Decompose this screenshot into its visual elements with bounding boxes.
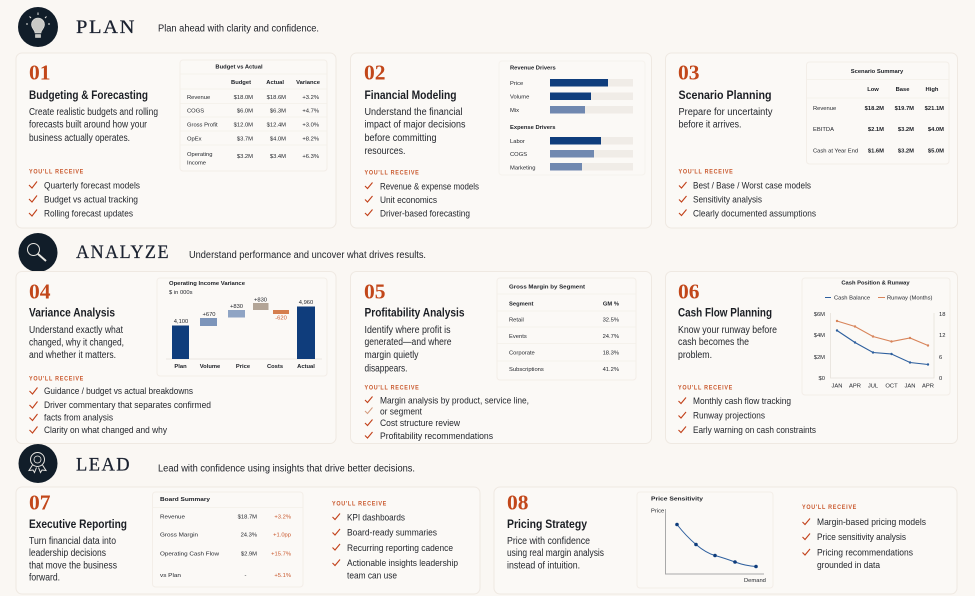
table: scenario summary: $4.0M: [928, 127, 944, 133]
you'll receive list: YOU'LL RECEIVE: [364, 170, 420, 176]
you'll receive list: Profitability recommendations: [380, 431, 493, 442]
chart: cash position and runway: APR: [922, 384, 934, 390]
table: gross margin by segment: Events: [509, 334, 527, 340]
table: budget vs actual: $18.6M: [267, 95, 286, 101]
description: impact of major decisions: [364, 120, 466, 130]
chart: cash position and runway: JAN: [905, 384, 915, 390]
card title: Pricing Strategy: [507, 519, 588, 531]
you'll receive list: Early warning on cash constraints: [693, 425, 816, 436]
table: budget vs actual: Operating: [187, 152, 212, 158]
card title: Scenario Planning: [678, 90, 772, 102]
table: scenario summary: High: [926, 87, 939, 93]
number 08: 08: [507, 490, 529, 514]
table: scenario summary: Cash at Year End: [813, 148, 858, 154]
you'll receive list: Margin analysis by product, service line,: [380, 396, 529, 406]
description: [364, 325, 452, 374]
description: Identify where profit is: [364, 325, 450, 336]
panel: 03 scenario planning: [666, 53, 958, 228]
description: forward.: [29, 572, 60, 584]
chart: cash position and runway: 12: [939, 333, 945, 339]
you'll receive list: [364, 170, 479, 220]
table: gross margin by segment: Segment: [509, 302, 534, 308]
you'll receive list: Revenue & expense models: [380, 182, 479, 192]
icon: magnifying glass: [18, 233, 58, 272]
description: forecasts built around how your: [29, 120, 148, 130]
chart: cash position and runway: $0: [819, 376, 825, 382]
table: board summary: +3.2%: [274, 514, 291, 520]
you'll receive list: Clearly documented assumptions: [693, 208, 816, 220]
you'll receive list: Guidance / budget vs actual breakdowns: [44, 386, 193, 397]
table: budget vs actual: Actual: [266, 80, 284, 86]
you'll receive list: [29, 170, 140, 220]
description: Price with confidence: [507, 536, 590, 547]
you'll receive list: Best / Base / Worst case models: [693, 180, 811, 192]
description: [29, 536, 117, 584]
description: [678, 107, 772, 130]
you'll receive list: YOU'LL RECEIVE: [29, 376, 84, 382]
number 06: 06: [678, 280, 700, 304]
number 05: 05: [364, 280, 386, 304]
chart: operating income variance waterfall: $ in 000s: [169, 290, 193, 296]
chart: cash position and runway: JUL: [868, 384, 879, 390]
you'll receive list: Unit economics: [380, 195, 437, 206]
chart: cash position and runway: Runway (Months): [887, 296, 932, 302]
you'll receive list: YOU'LL RECEIVE: [678, 170, 734, 176]
description: generated—and where: [364, 337, 452, 348]
you'll receive list: Monthly cash flow tracking: [693, 396, 791, 407]
table: budget vs actual: $3.2M: [237, 154, 253, 160]
you'll receive list: Cost structure review: [380, 418, 460, 429]
you'll receive list: [29, 376, 211, 436]
you'll receive list: [332, 502, 458, 582]
chart: cash position and runway: $2M: [814, 355, 825, 361]
description: before committing: [364, 133, 436, 144]
chart: operating income variance waterfall: Operating Income Variance: [169, 281, 246, 287]
you'll receive list: Runway projections: [693, 410, 765, 422]
chart: cash position and runway: 0: [939, 376, 942, 382]
number 04: 04: [29, 280, 51, 304]
table: budget vs actual: $6.3M: [270, 108, 286, 114]
table: budget vs actual: $12.4M: [267, 122, 286, 128]
panel: 06 cash flow planning: [666, 272, 958, 444]
chart: cash position and runway: Cash Balance: [834, 296, 870, 302]
table: budget vs actual: OpEx: [187, 136, 202, 142]
description: before it arrives.: [678, 120, 742, 130]
icon: award ribbon: [18, 444, 58, 483]
you'll receive list: [364, 386, 529, 442]
description: [364, 107, 466, 157]
you'll receive list: [678, 170, 816, 220]
chart: cash position and runway: 18: [939, 312, 945, 318]
table: budget vs actual: COGS: [187, 108, 204, 114]
you'll receive list: Driver-based forecasting: [380, 208, 470, 220]
panel: 02 financial modeling: [350, 53, 652, 228]
you'll receive list: YOU'LL RECEIVE: [29, 170, 84, 176]
description: resources.: [364, 146, 406, 157]
you'll receive list: Pricing recommendations: [817, 548, 913, 558]
chart: revenue and expense drivers: Volume: [510, 94, 529, 100]
you'll receive list: facts from analysis: [44, 412, 113, 424]
chart: revenue and expense drivers: Mix: [510, 108, 519, 114]
chart: operating income variance waterfall: -620: [275, 316, 287, 322]
table: board summary: +5.1%: [274, 573, 291, 579]
table: scenario summary: Scenario Summary: [851, 69, 904, 75]
you'll receive list: KPI dashboards: [347, 512, 405, 524]
chart: operating income variance waterfall: Actual: [297, 364, 315, 370]
panel: 04 variance analysis: [16, 272, 336, 444]
you'll receive list: Rolling forecast updates: [44, 208, 133, 220]
chart: price sensitivity curve: Price: [651, 508, 664, 514]
table: board summary: $18.7M: [238, 514, 257, 520]
table: scenario summary: $3.2M: [898, 127, 914, 133]
table: board summary: Operating Cash Flow: [160, 552, 220, 558]
description: using real margin analysis: [507, 548, 604, 559]
table: board summary: Gross Margin: [160, 532, 198, 538]
table: budget vs actual: Gross Profit: [187, 122, 218, 128]
chart: cash position and runway: $4M: [814, 333, 825, 339]
chart: revenue and expense drivers: Price: [510, 81, 523, 87]
description: Create realistic budgets and rolling: [29, 107, 158, 118]
table: scenario summary: [806, 62, 949, 164]
table: budget vs actual: $4.0M: [270, 136, 286, 142]
description: business actually operates.: [29, 133, 130, 144]
table: scenario summary: $2.1M: [868, 127, 884, 133]
table: budget vs actual: Income: [187, 160, 206, 166]
chart: revenue and expense drivers: Expense Drivers: [510, 125, 555, 131]
panel: 01 budgeting and forecasting: [16, 53, 336, 228]
description: disappears.: [364, 364, 408, 374]
number 01: 01: [29, 60, 50, 84]
you'll receive list: Price sensitivity analysis: [817, 532, 906, 543]
table: budget vs actual: +3.2%: [302, 95, 319, 101]
table: scenario summary: $5.0M: [928, 148, 944, 154]
number 02: 02: [364, 60, 386, 84]
description: and whether it matters.: [29, 350, 116, 361]
you'll receive list: Quarterly forecast models: [44, 180, 140, 192]
description: Understand the financial: [364, 107, 462, 118]
you'll receive list: Board-ready summaries: [347, 528, 437, 538]
chart: cash position and runway: [802, 278, 950, 395]
table: scenario summary: $3.2M: [898, 148, 914, 154]
number 07: 07: [29, 490, 51, 514]
chart: revenue and expense drivers: Labor: [510, 139, 525, 145]
table: board summary: +15.7%: [271, 552, 291, 558]
chart: operating income variance waterfall: Plan: [174, 364, 187, 370]
table: budget vs actual: $3.7M: [237, 136, 253, 142]
card title: Cash Flow Planning: [678, 308, 772, 320]
description: margin quietly: [364, 350, 418, 361]
chart: operating income variance waterfall: Volume: [200, 364, 221, 370]
table: scenario summary: Low: [867, 87, 879, 93]
description: Understand exactly what: [29, 325, 123, 336]
you'll receive list: or segment: [380, 406, 422, 418]
chart: cash position and runway: OCT: [885, 384, 898, 390]
description: instead of intuition.: [507, 560, 580, 572]
table: budget vs actual: Revenue: [187, 95, 210, 101]
table: budget vs actual: $6.0M: [237, 108, 253, 114]
panel: 05 profitability analysis: [350, 272, 652, 444]
table: budget vs actual: +3.0%: [302, 122, 319, 128]
table: budget vs actual: $12.0M: [234, 122, 253, 128]
chart: price sensitivity curve: Price Sensitivity: [651, 496, 704, 502]
chart: operating income variance waterfall: Costs: [267, 364, 283, 370]
you'll receive list: Driver commentary that separates confirmed: [44, 400, 211, 411]
description: changed, why it changed,: [29, 338, 124, 348]
chart: operating income variance waterfall: [157, 278, 327, 376]
you'll receive list: [678, 386, 816, 436]
card title: Financial Modeling: [364, 90, 456, 102]
you'll receive list: team can use: [347, 570, 397, 582]
chart: operating income variance waterfall: 4,100: [174, 319, 188, 325]
description: problem.: [678, 350, 712, 361]
number 03: 03: [678, 60, 700, 84]
table: board summary: -: [245, 573, 247, 579]
chart: operating income variance waterfall: 4,960: [299, 300, 313, 306]
you'll receive list: YOU'LL RECEIVE: [802, 505, 857, 511]
table: board summary: 24.3%: [241, 532, 257, 538]
you'll receive list: YOU'LL RECEIVE: [678, 386, 733, 392]
table: budget vs actual: +4.7%: [302, 108, 319, 114]
description: [678, 325, 777, 361]
table: budget vs actual: $18.0M: [234, 95, 253, 101]
chart: cash position and runway: 6: [939, 355, 942, 361]
tagline: lead: Lead with confidence using insights that drive better decisions.: [158, 464, 415, 474]
description: [507, 536, 604, 572]
table: gross margin by segment: Retail: [509, 318, 524, 324]
you'll receive list: Recurring reporting cadence: [347, 543, 453, 554]
table: gross margin by segment: Gross Margin by Segment: [509, 284, 585, 290]
card title: Variance Analysis: [29, 308, 115, 320]
you'll receive list: grounded in data: [817, 560, 881, 571]
table: gross margin by segment: 32.5%: [603, 318, 619, 324]
table: gross margin by segment: [497, 278, 636, 380]
you'll receive list: YOU'LL RECEIVE: [332, 502, 387, 508]
tagline: analyze: Understand performance and uncover what drives results.: [189, 250, 426, 261]
tagline: plan: Plan ahead with clarity and confidence.: [158, 24, 319, 34]
table: gross margin by segment: Subscriptions: [509, 367, 544, 373]
table: budget vs actual: Budget vs Actual: [215, 64, 263, 70]
chart: operating income variance waterfall: +670: [202, 312, 216, 318]
table: scenario summary: $1.6M: [868, 148, 884, 154]
table: budget vs actual: [180, 60, 327, 171]
heading: lead: LEAD: [76, 454, 131, 476]
table: budget vs actual: Budget: [231, 80, 251, 86]
section header: plan: [18, 7, 319, 47]
table: budget vs actual: +6.3%: [302, 154, 319, 160]
chart: operating income variance waterfall: +830: [230, 304, 243, 310]
table: board summary: Board Summary: [160, 497, 211, 503]
table: board summary: +1.0pp: [273, 532, 291, 538]
description: [29, 107, 158, 144]
table: board summary: $2.9M: [241, 552, 257, 558]
chart: cash position and runway: Cash Position & Runway: [841, 280, 910, 286]
table: scenario summary: $18.2M: [865, 106, 884, 112]
chart: operating income variance waterfall: +830: [254, 298, 267, 304]
chart: price sensitivity curve: Demand: [744, 578, 766, 584]
you'll receive list: YOU'LL RECEIVE: [364, 386, 420, 392]
chart: cash position and runway: JAN: [832, 384, 842, 390]
table: gross margin by segment: GM %: [603, 302, 619, 308]
table: gross margin by segment: 18.3%: [603, 350, 619, 356]
section header: lead: [18, 444, 415, 483]
chart: operating income variance waterfall: Price: [236, 364, 251, 370]
table: scenario summary: $19.7M: [895, 106, 914, 112]
description: [29, 325, 124, 361]
description: that move the business: [29, 560, 117, 572]
description: Turn financial data into: [29, 536, 116, 547]
chart: revenue and expense drivers: COGS: [510, 152, 527, 158]
table: scenario summary: EBITDA: [813, 127, 834, 133]
description: leadership decisions: [29, 548, 106, 559]
table: scenario summary: $21.1M: [925, 106, 944, 112]
table: budget vs actual: +8.2%: [302, 136, 319, 142]
chart: revenue and expense drivers: Marketing: [510, 166, 535, 172]
chart: revenue and expense drivers: [499, 61, 645, 175]
you'll receive list: Budget vs actual tracking: [44, 194, 138, 206]
section header: analyze: [18, 233, 426, 272]
description: cash becomes the: [678, 337, 749, 348]
table: gross margin by segment: 24.7%: [603, 334, 619, 340]
table: budget vs actual: $3.4M: [270, 154, 286, 160]
table: board summary: Revenue: [160, 514, 185, 520]
panel: 08 pricing strategy: [494, 487, 957, 594]
table: scenario summary: Base: [896, 87, 910, 93]
you'll receive list: Clarity on what changed and why: [44, 425, 167, 436]
chart: revenue and expense drivers: Revenue Drivers: [510, 66, 556, 72]
table: scenario summary: Revenue: [813, 106, 836, 112]
card title: Budgeting & Forecasting: [29, 90, 148, 102]
chart: cash position and runway: APR: [849, 384, 861, 390]
you'll receive list: Margin-based pricing models: [817, 517, 926, 528]
you'll receive list: Actionable insights leadership: [347, 558, 458, 569]
card title: Executive Reporting: [29, 519, 127, 531]
table: board summary: vs Plan: [160, 573, 181, 579]
description: Prepare for uncertainty: [678, 107, 772, 118]
you'll receive list: Sensitivity analysis: [693, 194, 762, 206]
chart: cash position and runway: $6M: [814, 312, 825, 318]
table: budget vs actual: Variance: [296, 80, 321, 86]
table: board summary: [152, 492, 303, 587]
heading: analyze: ANALYZE: [76, 242, 170, 263]
icon: lightbulb: [18, 7, 58, 47]
chart: price sensitivity curve: [637, 492, 773, 588]
card title: Profitability Analysis: [364, 308, 464, 320]
table: gross margin by segment: Corporate: [509, 350, 535, 356]
table: gross margin by segment: 41.2%: [603, 367, 619, 373]
you'll receive list: [802, 505, 926, 571]
description: Know your runway before: [678, 325, 777, 336]
panel: 07 executive reporting: [16, 487, 480, 594]
heading: plan: PLAN: [76, 17, 136, 38]
